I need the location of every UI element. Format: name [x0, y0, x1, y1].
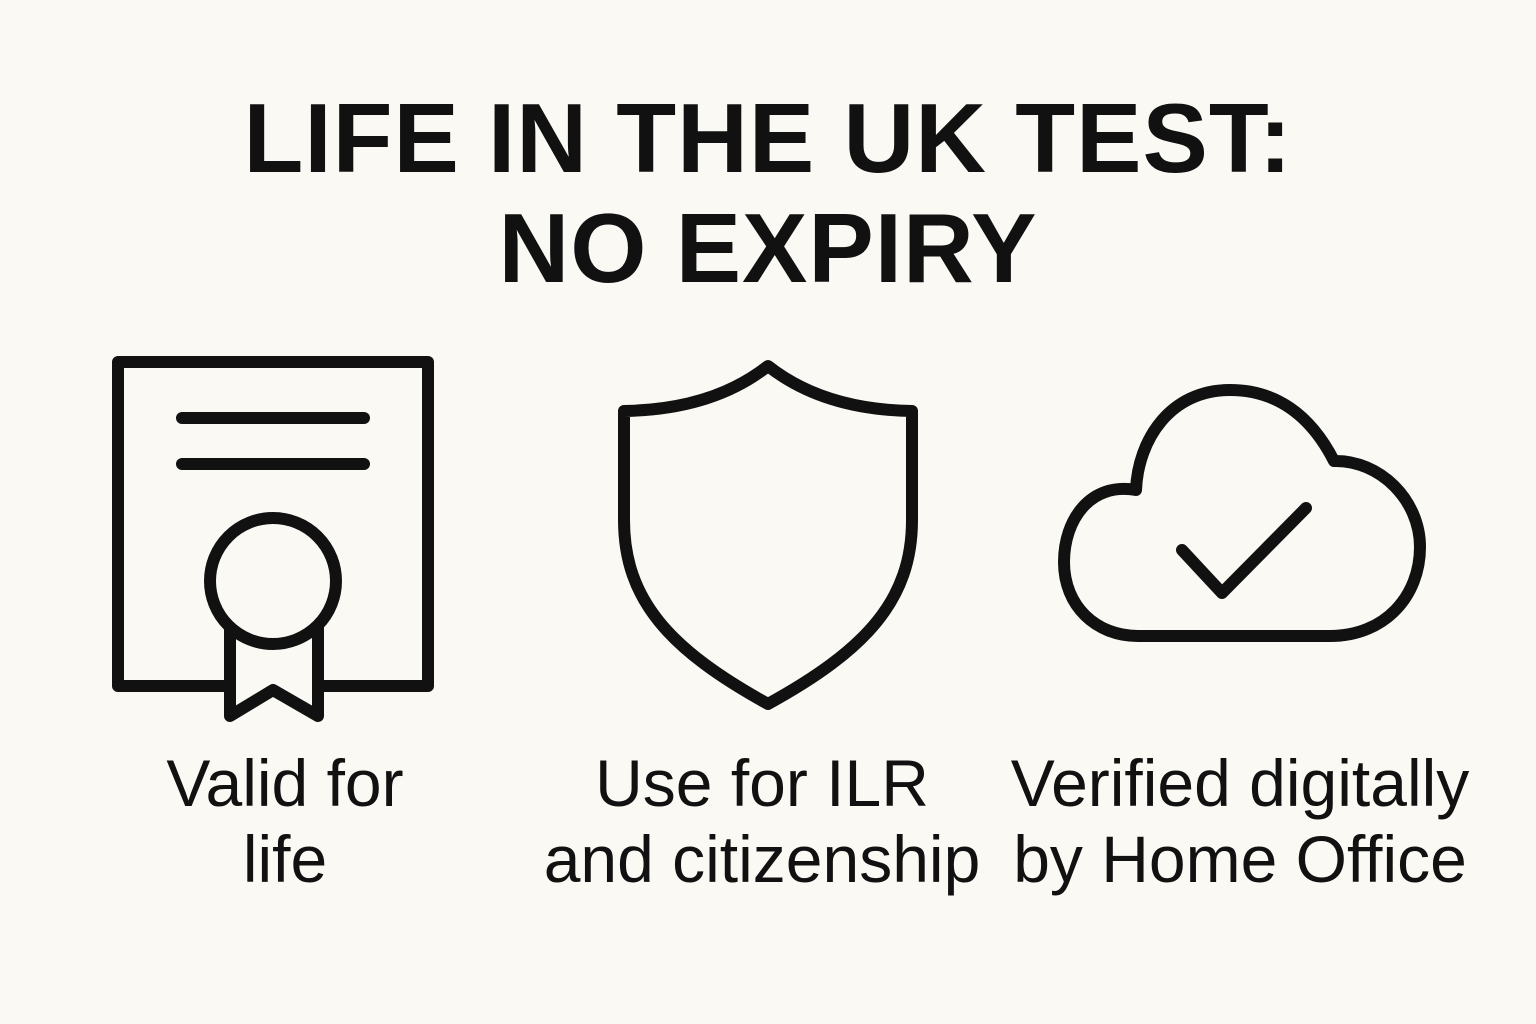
caption: valid: life — [243, 822, 327, 896]
caption: valid: Valid for — [166, 746, 404, 820]
caption: verified: by Home Office — [1013, 822, 1467, 896]
icon: cloud — [1064, 390, 1420, 636]
title — [244, 83, 1292, 303]
icon: certificate — [118, 362, 428, 716]
title: NO EXPIRY — [498, 193, 1038, 303]
title: LIFE IN THE UK TEST: — [244, 83, 1292, 193]
caption: valid — [166, 746, 404, 896]
caption: verified: Verified digitally — [1011, 746, 1469, 820]
caption: ILR: Use for ILR — [595, 746, 929, 820]
icon: shield — [624, 366, 912, 704]
caption: verified — [1011, 746, 1470, 896]
caption: ILR: and citizenship — [544, 822, 980, 896]
caption: ILR — [544, 746, 980, 896]
